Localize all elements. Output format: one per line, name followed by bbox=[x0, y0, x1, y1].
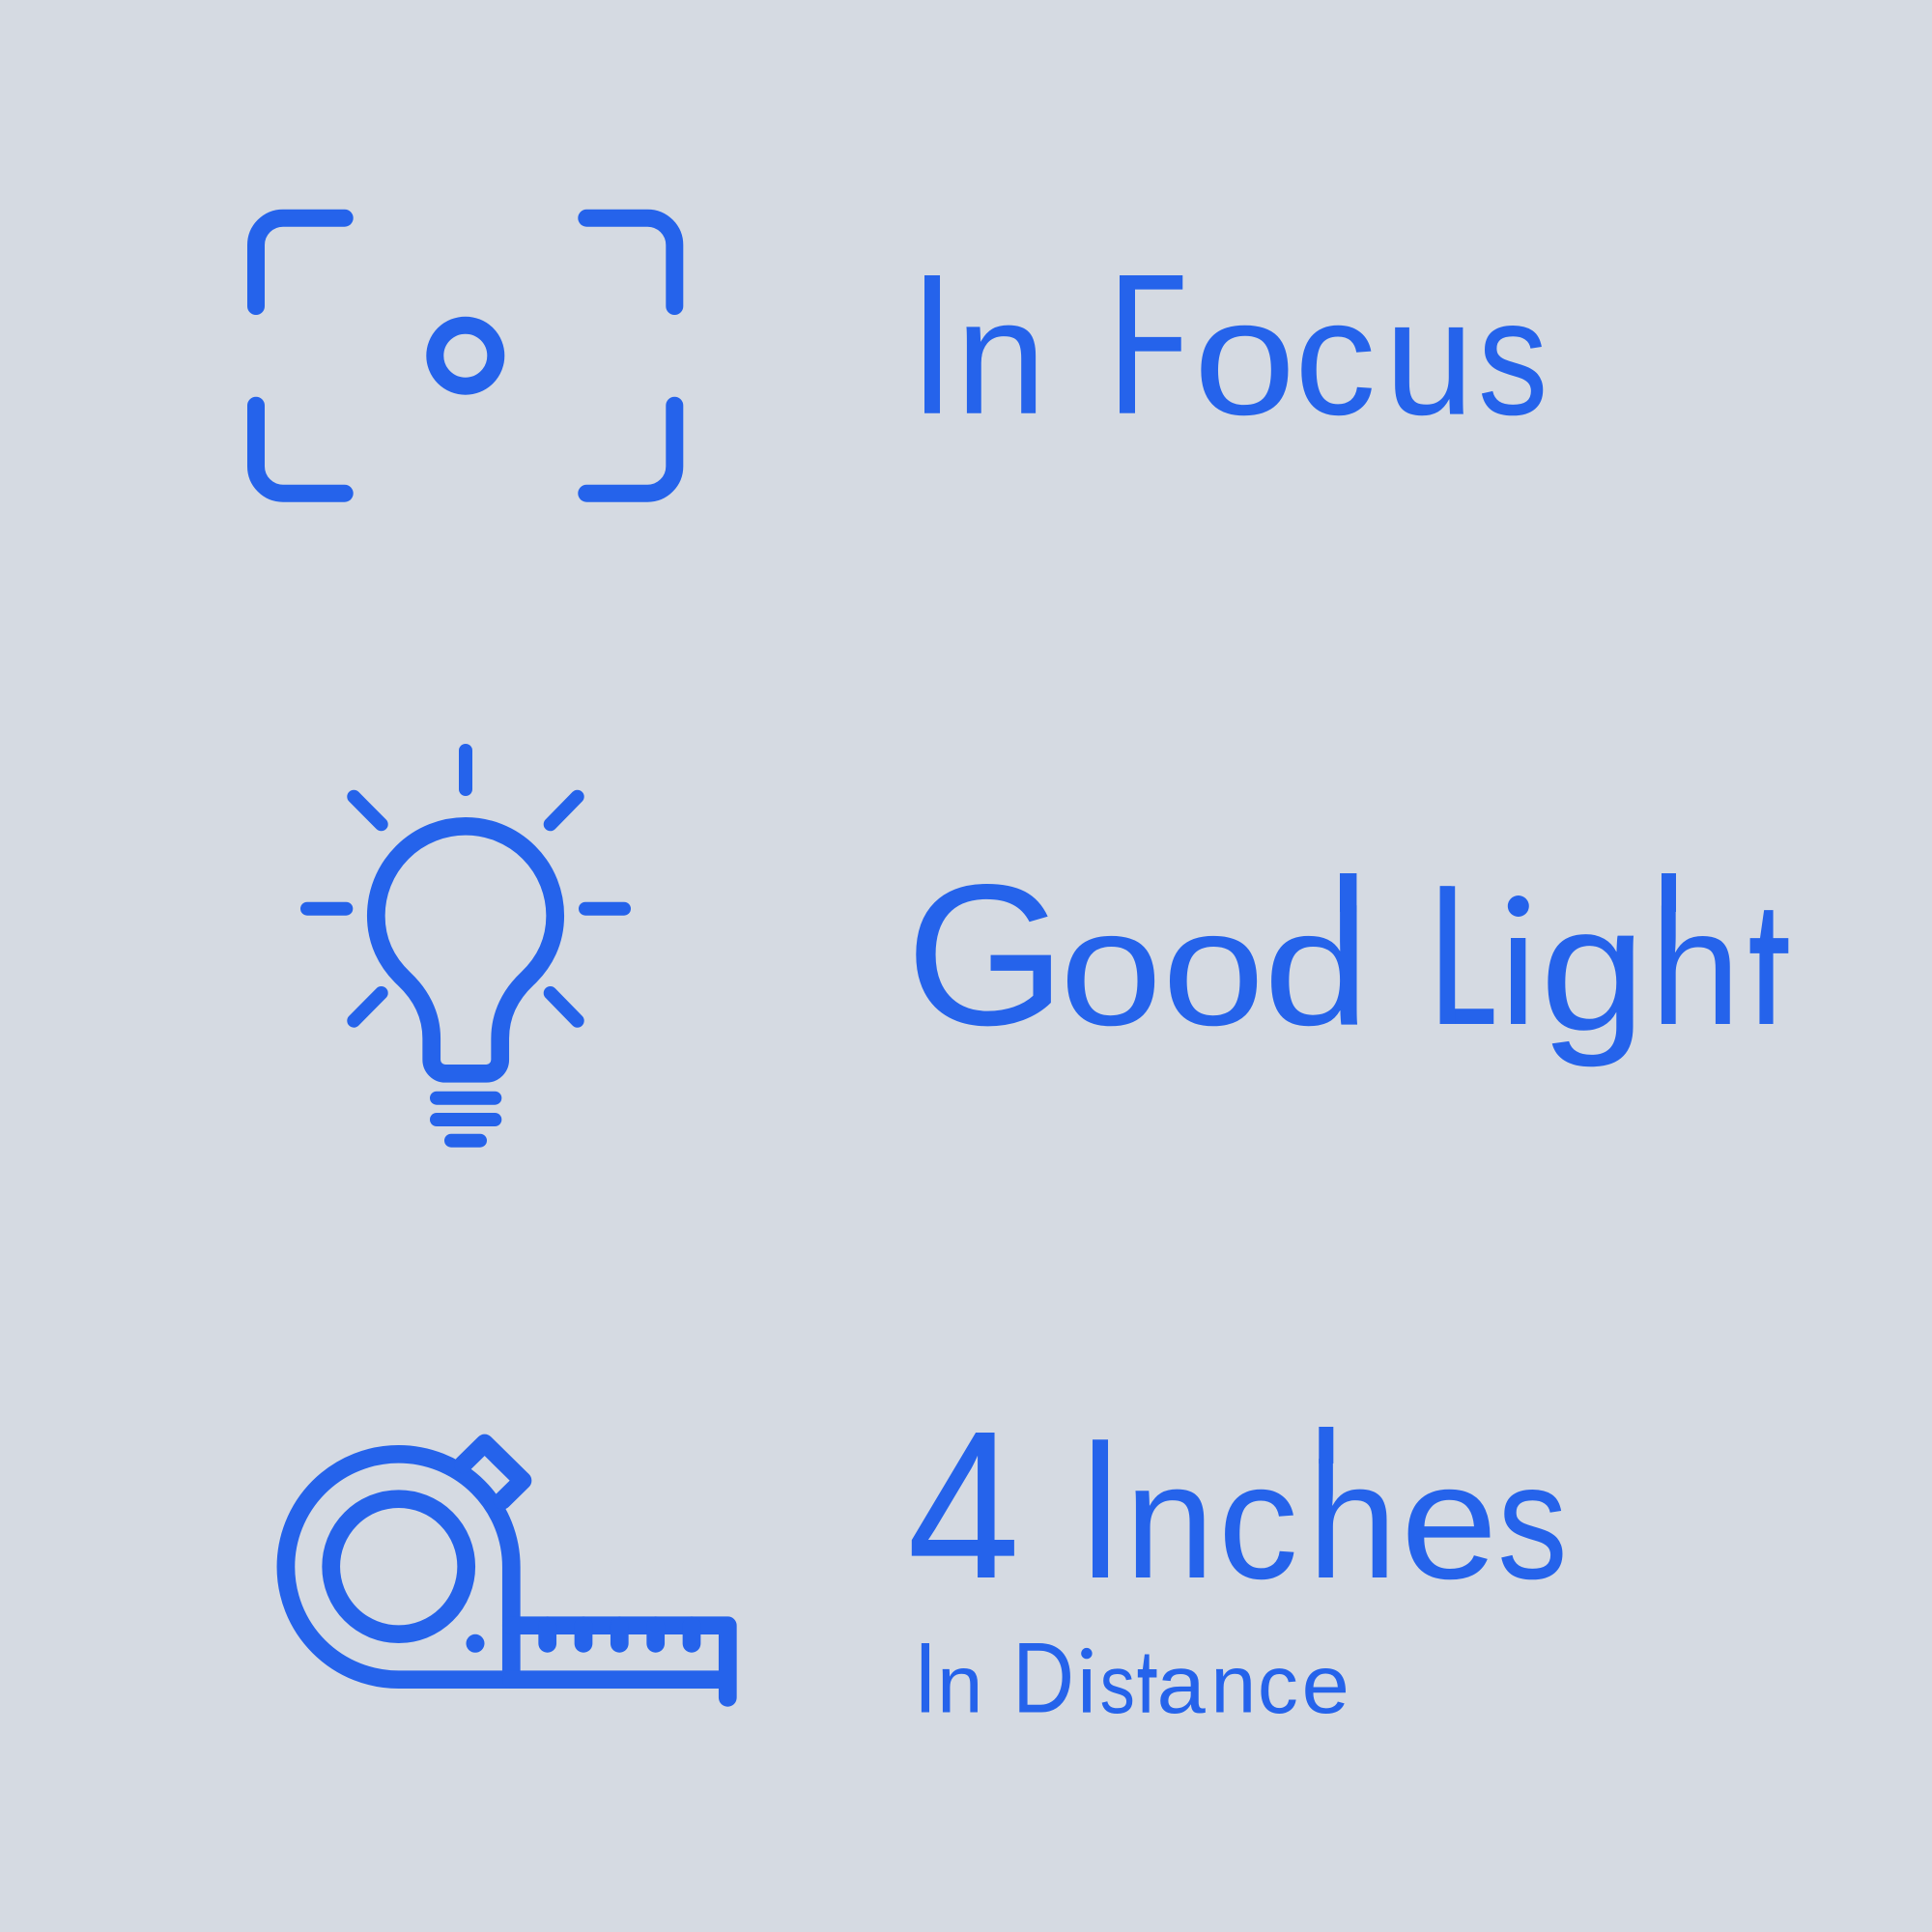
heading: Good Light: o bbox=[1162, 876, 1264, 1060]
icon: camera focus frame bbox=[256, 218, 674, 494]
heading: In Focus: n bbox=[955, 266, 1046, 448]
subheading: In Distance: n bbox=[937, 1638, 982, 1730]
heading: In Focus bbox=[909, 233, 1548, 456]
heading: In Focus: o bbox=[1193, 266, 1295, 449]
heading: Good Light: t bbox=[1747, 850, 1791, 1115]
heading: Good Light: G bbox=[906, 842, 1066, 1067]
subheading: In Distance: I bbox=[914, 1622, 937, 1734]
heading: 4 Inches: c bbox=[1218, 1429, 1298, 1613]
subheading: In Distance: i bbox=[1077, 1640, 1096, 1730]
subheading: In Distance: c bbox=[1258, 1638, 1298, 1730]
subheading: In Distance: t bbox=[1137, 1623, 1158, 1765]
heading: In Focus: I bbox=[909, 233, 955, 456]
heading: 4 Inches bbox=[912, 1427, 1563, 1580]
heading: 4 Inches: I bbox=[1077, 1398, 1123, 1621]
light rays bbox=[307, 751, 624, 1141]
heading: Good Light: i bbox=[1499, 878, 1537, 1059]
heading: In Focus: u bbox=[1384, 266, 1474, 449]
heading: Good Light bbox=[916, 873, 1789, 1066]
heading: 4 Inches: n bbox=[1124, 1430, 1214, 1612]
heading: In Focus: c bbox=[1294, 264, 1376, 449]
subheading: In Distance: e bbox=[1302, 1639, 1350, 1731]
subheading: In Distance bbox=[922, 1643, 1346, 1714]
icon: measuring tape bbox=[286, 1443, 727, 1697]
heading: Good Light: o bbox=[1060, 876, 1162, 1060]
heading: Good Light: h bbox=[1650, 875, 1741, 1059]
heading: 4 Inches: s bbox=[1497, 1429, 1568, 1613]
subheading: In Distance: n bbox=[1210, 1639, 1256, 1730]
heading: Good Light: g bbox=[1540, 869, 1646, 1068]
subheading: In Distance: D bbox=[1012, 1623, 1074, 1734]
subheading: In Distance: s bbox=[1100, 1638, 1135, 1731]
heading: Good Light: L bbox=[1430, 844, 1497, 1067]
heading: 4 Inches: h bbox=[1308, 1430, 1397, 1612]
bulb outline bbox=[376, 826, 555, 1073]
heading: 4 Inches: e bbox=[1401, 1430, 1497, 1614]
heading: Good Light: d bbox=[1264, 876, 1370, 1061]
heading: In Focus: F bbox=[1109, 236, 1188, 443]
heading: In Focus: s bbox=[1478, 264, 1548, 449]
heading: 4 Inches: 4 bbox=[907, 1382, 1020, 1641]
icon: light bulb bbox=[307, 751, 624, 1141]
subheading: In Distance: a bbox=[1156, 1638, 1206, 1731]
